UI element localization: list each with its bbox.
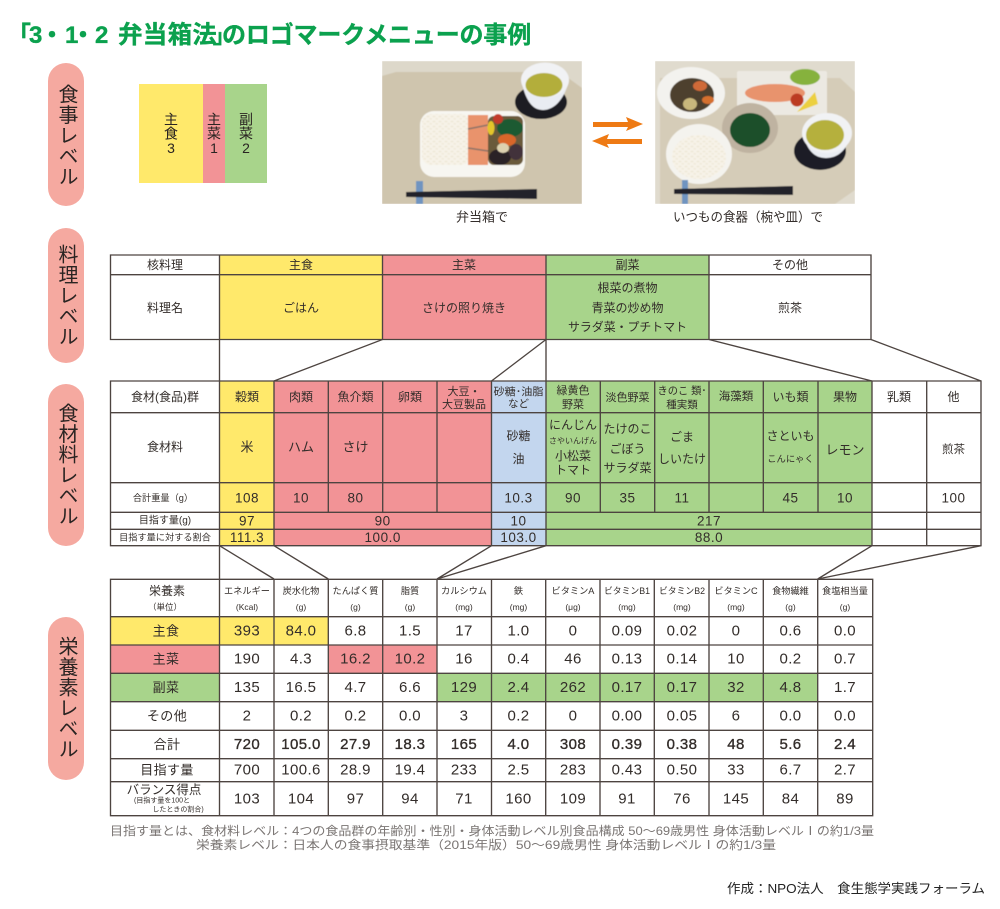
row: 合計: 18.3: [395, 736, 425, 753]
row: ingredients: レモン: [825, 442, 865, 458]
row: 主食: 6.8: [344, 622, 367, 640]
row: 目指す量: 28.9: [340, 762, 371, 778]
row: ingredients: 煎茶: [942, 442, 965, 456]
row: バランス得点: 91: [618, 790, 636, 808]
row: 副菜: 262: [560, 679, 586, 696]
row: その他: 0.2: [507, 708, 530, 724]
row: 主菜: 16: [455, 650, 473, 668]
row: その他: 0.05: [667, 708, 697, 724]
row: 目指す量: 目指す量: [140, 762, 194, 778]
row: 主食: 0.02: [667, 622, 697, 640]
row: バランス得点: 89: [836, 790, 854, 808]
header: nutrient names: エネルギー: [224, 586, 270, 596]
row: total weight: 合計重量（g）: [133, 492, 193, 503]
row: その他: その他: [147, 708, 187, 724]
row: core dish: 主菜: [452, 258, 476, 272]
connector lines: dish to ingredient: [220, 340, 981, 381]
header: nutrient names: ビタミンB2: [659, 586, 705, 596]
photo: everyday tableware meal: [655, 61, 855, 204]
row: その他: [147, 708, 856, 724]
row: food groups: 魚介類: [337, 390, 374, 404]
row: 副菜: 135: [234, 679, 260, 696]
row: 副菜: 129: [451, 679, 477, 696]
row: total weight: 10.3: [504, 490, 533, 506]
row: その他: 3: [460, 708, 468, 724]
row fills: staple, main, side: [220, 255, 709, 340]
row: ingredients: 砂糖: [506, 429, 531, 443]
ratio: 副菜2: 副菜2: [238, 112, 254, 156]
row: dish names: 青菜の炒め物: [591, 301, 664, 315]
row: ingredients: ハム: [288, 440, 314, 454]
row: food groups: 果物: [833, 390, 857, 404]
row: food groups: 淡色野菜: [606, 391, 650, 404]
row: total weight: [133, 490, 966, 506]
row: 合計: 5.6: [779, 736, 802, 753]
row: 主食: 0: [732, 622, 740, 640]
row: ingredients: こんにゃく: [767, 454, 814, 464]
row: 目指す量: 700: [234, 762, 260, 778]
row: food groups: 大豆製品: [442, 397, 486, 411]
row: dish names: サラダ菜・プチトマト: [568, 319, 687, 334]
row: ingredients: 小松菜: [555, 449, 591, 463]
table: nutrient level: [110, 579, 873, 816]
row: target amount: 97: [239, 514, 255, 528]
row: total weight: 10: [837, 490, 853, 506]
caption: bento box: 弁当箱で: [456, 210, 508, 224]
row: 副菜: 0.17: [667, 679, 697, 696]
row: ratio to target: 103.0: [500, 530, 537, 545]
row: 合計: 4.0: [507, 736, 530, 753]
row: ratio to target: 88.0: [695, 530, 723, 545]
row: 主食: 0.6: [779, 622, 802, 640]
row: バランス得点: [127, 782, 854, 814]
row: その他: 0.2: [290, 708, 312, 724]
row: food groups: 緑黄色: [556, 383, 590, 397]
header: units: [148, 602, 850, 612]
row: food groups: 砂糖･油脂: [494, 385, 544, 398]
row: バランス得点: 145: [723, 790, 749, 808]
row: target amount: 217: [697, 514, 721, 528]
row: food groups: きのこ 類･: [658, 385, 706, 397]
row: 副菜: 2.4: [507, 679, 530, 696]
row: バランス得点: 104: [288, 790, 314, 808]
row: ingredients: ごま: [670, 429, 694, 444]
row: 副菜: 4.7: [344, 679, 367, 696]
header: units: (mg): [510, 602, 527, 612]
row: 主菜: 主菜: [153, 652, 179, 666]
header: units: (mg): [727, 602, 745, 612]
row: バランス得点: 97: [347, 790, 364, 808]
row: core dish: [147, 258, 808, 272]
row: 主菜: 190: [234, 650, 260, 668]
header: nutrient names: たんぱく質: [333, 585, 378, 596]
title: 」: [214, 26, 234, 48]
row: dish names: 根菜の煮物: [597, 281, 658, 295]
row: 主菜: [153, 650, 856, 668]
row: 目指す量: 233: [451, 762, 477, 778]
row: 目指す量: 19.4: [395, 762, 425, 778]
header: units: (g): [785, 602, 796, 612]
row: その他: 2: [243, 708, 251, 724]
row: core dish: 副菜: [615, 258, 640, 272]
row: 合計: 合計: [154, 737, 180, 752]
row: その他: 0: [569, 708, 577, 724]
row: 合計: [154, 736, 856, 753]
row: その他: 0.00: [612, 708, 642, 724]
title: 1: [65, 22, 78, 49]
row: 合計: 308: [560, 736, 586, 753]
row: 主菜: 0.7: [834, 650, 856, 668]
header: nutrient names: 脂質: [401, 585, 419, 596]
credit: 作成：NPO法人 食生態学実践フォーラム: [727, 881, 985, 896]
header: nutrient names: 栄養素: [149, 583, 185, 598]
row: 主菜: 16.2: [340, 650, 371, 668]
row: total weight: 108: [235, 490, 259, 506]
row: food groups: など: [508, 398, 529, 410]
ratio: 主菜1: 主菜1: [206, 112, 222, 156]
header: units: (mg): [455, 602, 473, 612]
row: total weight: 35: [619, 490, 636, 506]
row: ingredients: にんじん: [549, 418, 597, 432]
header: nutrient names: 鉄: [514, 585, 523, 596]
row: 主菜: 0.14: [667, 650, 697, 668]
header: units: (g): [296, 602, 306, 612]
row: ingredients: サラダ菜: [603, 460, 652, 475]
row: 副菜: 6.6: [399, 679, 421, 696]
row: total weight: 11: [674, 490, 690, 506]
level pill: 料理レベル: [48, 228, 84, 363]
meal ratio block 3:1:2: [139, 84, 267, 183]
photo: bento box meal: [382, 61, 582, 204]
row: ingredients: [147, 418, 965, 477]
row: dish names: さけの照り焼き: [422, 301, 506, 315]
row: 合計: 48: [727, 736, 745, 753]
row: バランス得点: 94: [401, 790, 419, 808]
row: 合計: 165: [451, 736, 477, 753]
row: バランス得点: 109: [560, 790, 586, 808]
row: 主食: 主食: [153, 624, 179, 638]
row: 目指す量: 6.7: [779, 762, 802, 778]
row: 合計: 720: [234, 736, 260, 753]
row: total weight: 45: [782, 490, 799, 506]
row: food groups: 肉類: [289, 390, 313, 404]
title: ・: [40, 22, 64, 49]
ratio: 主食3: 主食3: [163, 112, 179, 156]
row: dish names: 煎茶: [778, 300, 802, 315]
footnote: definition of target amounts: [110, 823, 874, 852]
row: 主菜: 0.4: [507, 650, 530, 668]
row: ratio to target: 111.3: [230, 530, 264, 545]
row: バランス得点: したときの割合): [152, 804, 204, 814]
header: units: (g): [405, 602, 415, 612]
header: nutrient names: ビタミンC: [714, 586, 758, 596]
header: nutrient names: [149, 583, 868, 598]
connector lines: ingredient to nutrient: [220, 546, 981, 579]
table: ingredient level: [110, 381, 981, 546]
title: ・: [71, 22, 95, 49]
row: ingredients: 米: [240, 440, 254, 454]
row: その他: 0.0: [399, 708, 421, 724]
row: 副菜: 0.17: [612, 679, 642, 696]
row: バランス得点: バランス得点: [127, 782, 201, 797]
row: total weight: 100: [941, 490, 966, 506]
header: units: (g): [840, 602, 850, 612]
header: units: (μg): [565, 602, 581, 612]
level pill: 食事レベル: [48, 63, 84, 206]
row: その他: 6: [732, 708, 740, 724]
row: 目指す量: 0.43: [612, 762, 642, 778]
row: その他: 0.2: [344, 708, 367, 724]
row: 副菜: 32: [727, 679, 745, 696]
header: nutrient names: 食物繊維: [772, 585, 809, 596]
row: food groups: 他: [947, 390, 960, 404]
row: food groups: 乳類: [887, 390, 911, 404]
row: 副菜: [153, 679, 856, 696]
level pill: 食事レベル: 食事レベル: [55, 84, 78, 186]
footnote: definition of target amounts: 栄養素レベル：日本人の食事摂取基準（2015年版）50～69歳男性 身体活動レベルⅠの約1/3量: [196, 837, 776, 852]
row: バランス得点: 84: [782, 790, 799, 808]
highlighted cells: [110, 617, 818, 702]
level pill: 料理レベル: 料理レベル: [55, 244, 78, 346]
row: 主食: 0: [569, 622, 577, 640]
row: dish names: 料理名: [147, 300, 183, 315]
column fills by food group: [220, 381, 872, 546]
row: その他: 0.0: [834, 708, 856, 724]
row: target amount: 90: [375, 514, 391, 528]
row: 目指す量: 283: [560, 762, 586, 778]
row: バランス得点: (目指す量を100と: [134, 796, 190, 804]
row: dish names: ごはん: [283, 300, 319, 315]
row: 主食: 17: [455, 622, 473, 640]
row: 副菜: 4.8: [779, 679, 802, 696]
arrow: to left: [592, 134, 642, 148]
header: units: (mg): [618, 602, 636, 612]
row: 副菜: 1.7: [834, 679, 856, 696]
row: dish names: [147, 281, 802, 334]
row: core dish: その他: [772, 258, 808, 272]
row: target amount: [139, 514, 721, 528]
row: core dish: 主食: [289, 258, 313, 272]
row: 目指す量: 2.7: [834, 762, 856, 778]
table: dish level: [110, 255, 871, 340]
row: 主菜: 0.13: [612, 650, 642, 668]
row: 主食: 0.09: [612, 622, 642, 640]
row: total weight: 80: [347, 490, 364, 506]
row: ingredients: トマト: [555, 463, 591, 477]
row: 主食: 1.0: [507, 622, 530, 640]
row: 合計: 105.0: [281, 736, 321, 753]
header: units: (Kcal): [236, 602, 258, 612]
row: ingredients: さけ: [342, 440, 369, 454]
header: nutrient names: ビタミンB1: [604, 586, 650, 596]
row: 目指す量: 33: [727, 762, 745, 778]
row: 目指す量: 100.6: [281, 762, 321, 778]
row: food groups: 野菜: [562, 398, 584, 411]
row: ratio to target: 100.0: [365, 530, 401, 545]
row: バランス得点: 76: [673, 790, 691, 808]
header: units: （単位）: [148, 602, 182, 612]
row: 主食: [153, 622, 856, 640]
row: 主菜: 0.2: [779, 650, 802, 668]
row: 主菜: 4.3: [290, 650, 312, 668]
row: target amount: 10: [510, 514, 527, 528]
level pill: 栄養素レベル: [48, 617, 84, 780]
row: 合計: 27.9: [340, 736, 371, 753]
row: target amount: 目指す量(g): [139, 514, 191, 526]
level pill: 食材料レベル: [48, 384, 84, 546]
title: 3: [29, 22, 42, 49]
row: バランス得点: 160: [505, 790, 532, 808]
footnote: definition of target amounts: 目指す量とは、食材料レベル：4つの食品群の年齢別・性別・身体活動レベル別食品構成 50～69歳男性 身体活動レベルⅠの約1/3量: [110, 823, 874, 838]
row: ratio to target: [119, 530, 723, 545]
row: 目指す量: 0.50: [667, 762, 697, 778]
row: ingredients: 油: [512, 452, 525, 466]
row: 主食: 1.5: [399, 622, 421, 640]
level pill: 食材料レベル: 食材料レベル: [55, 403, 78, 526]
row: total weight: 10: [293, 490, 309, 506]
row: food groups: 海藻類: [719, 389, 754, 403]
row: 主菜: 10.2: [395, 650, 425, 668]
header: units: (mg): [673, 602, 691, 612]
row: 副菜: 16.5: [286, 679, 316, 696]
header: units: (g): [350, 602, 361, 612]
row: 合計: 0.39: [612, 736, 642, 753]
row: total weight: 90: [565, 490, 581, 506]
row: 主菜: 46: [564, 650, 582, 668]
arrows: reversible conversion: [592, 117, 643, 148]
row: 合計: 0.38: [667, 736, 697, 753]
row: ingredients: さといも: [766, 429, 815, 443]
row: 主食: 84.0: [286, 622, 316, 640]
row: 主食: 0.0: [834, 622, 856, 640]
caption: everyday tableware: いつもの食器（椀や皿）で: [673, 210, 823, 224]
row: food groups: 穀類: [235, 390, 259, 404]
row: ingredients: さやいんげん: [549, 436, 597, 446]
row: ingredients: しいたけ: [658, 452, 706, 466]
row: core dish: 核料理: [147, 258, 183, 272]
title: 弁当箱法: [118, 21, 217, 49]
header: nutrient names: ビタミンA: [552, 586, 595, 596]
row: food groups: 大豆・: [448, 384, 480, 398]
row: バランス得点: 71: [455, 790, 473, 808]
row: food groups: いも類: [772, 390, 809, 404]
row: バランス得点: 103: [234, 790, 260, 808]
arrow: to right: [593, 117, 643, 131]
row: food groups: 種実類: [666, 398, 698, 411]
row: 合計: 2.4: [834, 736, 856, 753]
row: ingredients: 食材料: [147, 440, 183, 454]
row: その他: 0.0: [779, 708, 802, 724]
row: food groups: 卵類: [398, 390, 422, 404]
row: food groups: 食材(食品)群: [131, 390, 199, 404]
header: nutrient names: 食塩相当量: [822, 585, 868, 596]
row: ratio to target: 目指す量に対する割合: [119, 532, 211, 542]
row: 主食: 393: [234, 622, 260, 640]
row: 主菜: 10: [727, 650, 745, 668]
row: food groups: [131, 383, 960, 411]
header: nutrient names: カルシウム: [441, 586, 487, 596]
row: ingredients: ごぼう: [609, 441, 646, 456]
level pill: 栄養素レベル: 栄養素レベル: [55, 636, 78, 759]
title: のロゴマークメニューの事例: [222, 21, 531, 49]
row: 目指す量: [140, 762, 856, 778]
row: 目指す量: 2.5: [507, 762, 530, 778]
title: 2: [95, 22, 108, 49]
header: nutrient names: 炭水化物: [283, 585, 319, 596]
row: 副菜: 副菜: [153, 680, 179, 695]
title: 「: [7, 22, 31, 49]
row: ingredients: たけのこ: [603, 422, 652, 436]
